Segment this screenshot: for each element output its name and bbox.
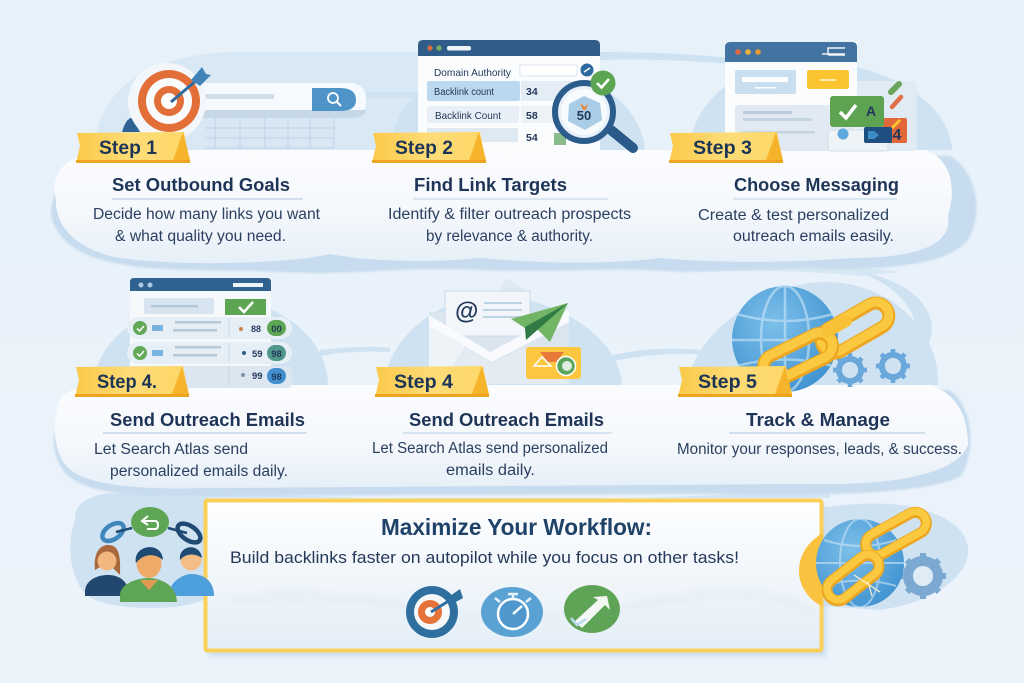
heading: send outreach emails second: Send Outreach Emails (409, 409, 604, 430)
text: step 3 description (698, 207, 894, 245)
icon: globe and chain right (799, 507, 946, 607)
icon: outreach list window: 99 (252, 371, 263, 382)
tag: step 4 second (375, 366, 489, 397)
panel: top row white banner (54, 150, 952, 263)
icon: domain authority window with magnifier: Backlink count (434, 87, 494, 98)
icon: messaging window with A/B cards: A (866, 103, 876, 119)
icon: small target (406, 586, 463, 638)
text: step 5 description: Monitor your responses, leads, & success. (677, 441, 962, 458)
tag: step 4 first: Step 4. (97, 372, 157, 393)
icon: outreach list window: 98 (271, 372, 282, 383)
text: step 2 description (388, 206, 631, 245)
icon: stopwatch (481, 587, 543, 637)
panel: middle row white banner (55, 385, 968, 488)
icon: domain authority window with magnifier: Domain Authority (434, 67, 512, 79)
tag: step 3 (669, 132, 783, 163)
tag: step 5 (678, 366, 792, 397)
text: step 2 description: by relevance & authority. (426, 228, 593, 245)
heading: choose messaging: Choose Messaging (734, 174, 899, 195)
heading: find link targets: Find Link Targets (414, 174, 567, 195)
text: step 2 description: Identify & filter outreach prospects (388, 206, 631, 223)
panel: middle row shadow (54, 390, 971, 496)
heading: track and manage: Track & Manage (746, 409, 890, 430)
icon: team with linked chain (85, 507, 214, 602)
icon: domain authority window with magnifier: 54 (526, 132, 538, 144)
text: step 3 description: outreach emails easily. (733, 228, 894, 245)
text: step 4 first description (94, 441, 288, 480)
icon: outreach list window (127, 278, 292, 388)
text: step 3 description: Create & test personalized (698, 207, 889, 224)
icon: domain authority window with magnifier: 50 (577, 108, 591, 123)
icon: outreach list window: 88 (251, 324, 261, 334)
tag: step 2: Step 2 (395, 138, 453, 159)
icon: envelope with paper plane (429, 278, 581, 384)
tag: step 1 (76, 132, 190, 163)
tag: step 5: Step 5 (698, 372, 757, 393)
text: step 1 description: Decide how many links you want (93, 206, 321, 223)
icon: envelope with paper plane: @ (455, 298, 478, 325)
heading: send outreach emails first: Send Outreach Emails (110, 409, 305, 430)
tag: step 2 (372, 132, 486, 163)
icon: messaging window with A/B cards: 4 (893, 127, 902, 144)
icon: outreach list window: 59 (252, 349, 263, 360)
tag: step 4 first (75, 366, 189, 397)
icon: target and search bar (122, 63, 366, 148)
backdrop blobs and connecting ribbons (70, 52, 968, 610)
text: step 4 first description: personalized emails daily. (110, 463, 288, 480)
tag: step 1: Step 1 (99, 138, 157, 159)
tag: step 3: Step 3 (693, 138, 752, 159)
heading: maximize your workflow: Maximize Your Workflow: (381, 514, 652, 540)
icon: messaging window with A/B cards (725, 42, 917, 152)
icon: domain authority window with magnifier: 34 (526, 86, 538, 98)
icon: globe, chain and gears (732, 286, 910, 392)
heading: set outbound goals: Set Outbound Goals (112, 174, 290, 195)
text: callout description: Build backlinks faster on autopilot while you focus on other tasks! (230, 548, 739, 567)
text: step 4 second description (372, 440, 608, 479)
icon: domain authority window with magnifier (418, 40, 633, 152)
text: step 1 description (93, 206, 321, 245)
panel: top row shadow (51, 156, 976, 273)
icon: domain authority window with magnifier: 58 (526, 110, 538, 122)
icon: domain authority window with magnifier: Backlink Count (435, 110, 501, 122)
icon: outreach list window: 98 (271, 349, 282, 360)
text: step 1 description: & what quality you need. (115, 228, 286, 245)
icon: outreach list window: 00 (271, 324, 282, 335)
text: step 4 second description: Let Search Atlas send personalized (372, 440, 608, 457)
text: step 4 first description: Let Search Atlas send (94, 441, 248, 458)
text: step 4 second description: emails daily. (446, 462, 535, 479)
icon: growth arrow (564, 585, 620, 633)
panel: maximize your workflow callout (206, 500, 826, 656)
tag: step 4 second: Step 4 (394, 372, 453, 393)
